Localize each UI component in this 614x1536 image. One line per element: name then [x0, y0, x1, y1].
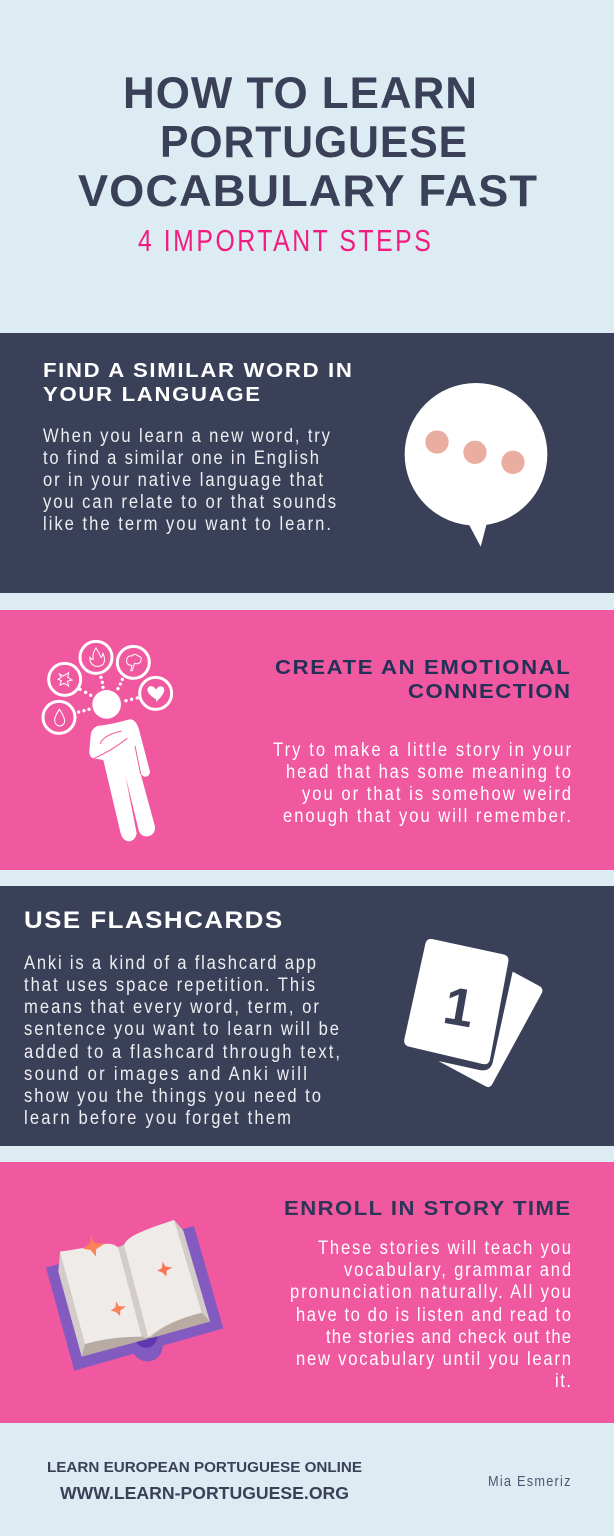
icon: open book — [46, 1220, 223, 1371]
heading: emotional connection: CONNECTION — [408, 680, 570, 703]
icon: flashcards — [404, 939, 542, 1087]
text block: find a similar word — [43, 425, 336, 534]
text block: use flashcards: Anki is a kind of a flashcard app — [24, 952, 316, 973]
text block: use flashcards: show you the things you need to — [24, 1085, 321, 1106]
text block: enroll in story time: have to do is listen and read to — [296, 1304, 571, 1325]
text block: find a similar word: to find a similar one in English — [43, 447, 319, 468]
footer: site credits: WWW.LEARN-PORTUGUESE.ORG — [60, 1483, 349, 1503]
text block: emotional connection: Try to make a little story in your — [273, 739, 571, 760]
title: VOCABULARY FAST — [78, 167, 538, 216]
text block: find a similar word: you can relate to or that sounds — [43, 491, 336, 512]
icon: speech bubble — [405, 383, 547, 547]
panel: find a similar word — [0, 333, 614, 593]
text block: use flashcards — [24, 952, 340, 1128]
text block: emotional connection: head that has some meaning to — [286, 761, 571, 782]
footer: author: Mia Esmeriz — [488, 1472, 570, 1489]
text block: find a similar word: When you learn a new word, try — [43, 425, 330, 446]
text block: use flashcards: sound or images and Anki will — [24, 1063, 307, 1084]
text block: use flashcards: added to a flashcard through text, — [24, 1041, 340, 1062]
heading: find a similar word: YOUR LANGUAGE — [43, 383, 260, 406]
text block: enroll in story time: vocabulary, grammar and — [344, 1259, 571, 1280]
panel: enroll in story time — [0, 1162, 614, 1423]
text block: emotional connection: enough that you will remember. — [283, 805, 571, 826]
icon: flashcards: 1 — [439, 976, 479, 1039]
icon: person with emotion bubbles — [43, 641, 172, 841]
text block: find a similar word: or in your native language that — [43, 469, 323, 490]
text block: enroll in story time: These stories will teach you — [318, 1237, 571, 1258]
panel: use flashcards — [0, 886, 614, 1146]
text block: emotional connection: you or that is somehow weird — [302, 783, 571, 804]
subtitle: 4 IMPORTANT STEPS — [138, 223, 431, 258]
text block: emotional connection — [273, 739, 571, 826]
text block: enroll in story time — [290, 1237, 571, 1391]
text block: enroll in story time: new vocabulary until you learn — [296, 1348, 571, 1369]
text block: use flashcards: learn before you forget them — [24, 1107, 291, 1128]
heading: emotional connection — [275, 656, 570, 703]
heading: find a similar word: FIND A SIMILAR WORD IN — [43, 359, 352, 382]
text block: find a similar word: like the term you want to learn. — [43, 513, 331, 534]
heading: find a similar word — [43, 359, 352, 406]
text block: use flashcards: that uses space repetition. This — [24, 974, 315, 995]
text block: enroll in story time: it. — [555, 1370, 571, 1391]
title: HOW TO LEARN — [123, 69, 478, 118]
heading: emotional connection: CREATE AN EMOTIONAL — [275, 656, 570, 679]
title: PORTUGUESE — [160, 118, 468, 167]
text block: use flashcards: means that every word, term, or — [24, 996, 319, 1017]
text block: enroll in story time: pronunciation naturally. All you — [290, 1281, 571, 1302]
footer: site credits — [47, 1460, 362, 1503]
footer: site credits: LEARN EUROPEAN PORTUGUESE ONLINE — [47, 1460, 362, 1476]
text block: use flashcards: sentence you want to learn will be — [24, 1018, 339, 1039]
title — [78, 69, 538, 216]
heading: enroll in story time: ENROLL IN STORY TIME — [284, 1197, 570, 1220]
text block: enroll in story time: the stories and check out the — [326, 1326, 571, 1347]
heading: use flashcards: USE FLASHCARDS — [24, 907, 282, 934]
panel: emotional connection — [0, 610, 614, 870]
